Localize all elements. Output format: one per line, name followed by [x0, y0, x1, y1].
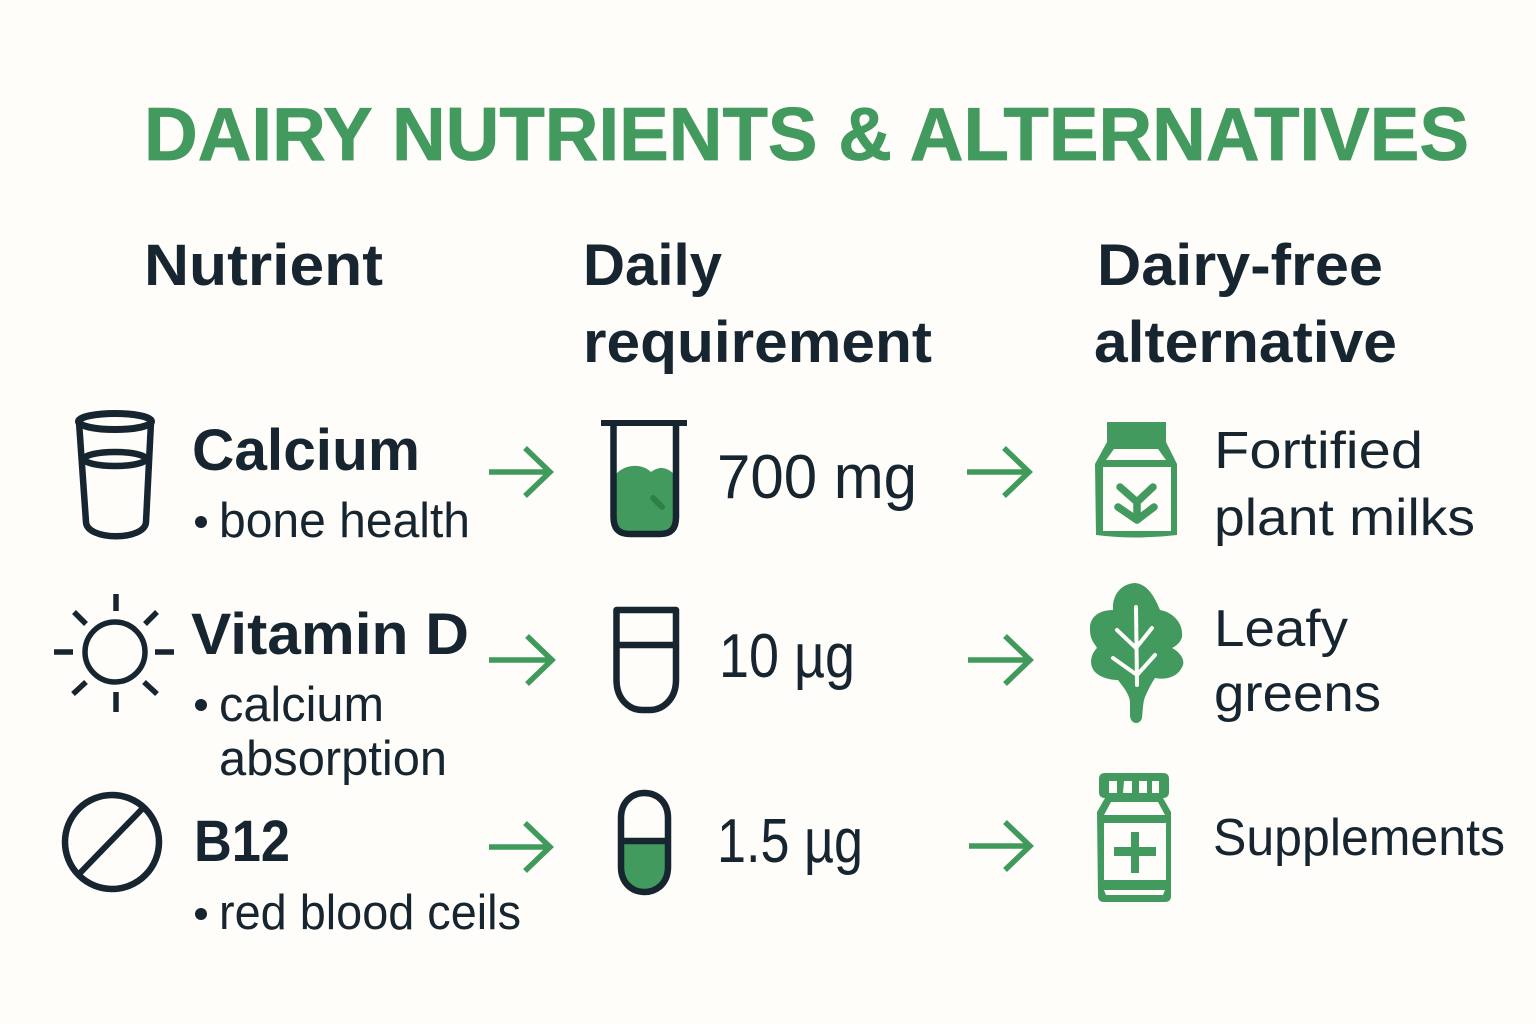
- alternative: leafy greens: Leafy: [1214, 600, 1348, 658]
- nutrient: vitamin D: Vitamin D: [191, 602, 469, 667]
- alternative: supplements: Supplements: [1213, 809, 1505, 867]
- requirement: 700 mg: 700 mg: [717, 443, 917, 512]
- icon: empty capsule: [616, 610, 676, 710]
- requirement: 1.5 µg: 1.5 µg: [717, 807, 863, 876]
- nutrient: B12: [194, 809, 521, 940]
- nutrient: calcium: [192, 418, 470, 548]
- icon: leafy green: [1090, 583, 1183, 723]
- nutrient: B12: B12: [194, 809, 290, 874]
- title: DAIRY NUTRIENTS & ALTERNATIVES: [144, 92, 1469, 176]
- column heading: daily requirement: requirement: [583, 310, 932, 375]
- alternative: leafy greens: [1214, 600, 1381, 723]
- column heading: dairy-free alternative: [1094, 233, 1397, 375]
- column heading: dairy-free alternative: Dairy-free: [1097, 233, 1383, 298]
- arrow: [969, 822, 1030, 870]
- arrow: [489, 448, 550, 496]
- alternative: fortified plant milks: [1214, 422, 1475, 547]
- arrow: [489, 823, 550, 871]
- alternative: fortified plant milks: plant milks: [1214, 489, 1475, 547]
- icon: supplement bottle: [1097, 773, 1171, 902]
- icon: glass of milk: [78, 414, 152, 536]
- alternative: fortified plant milks: Fortified: [1214, 422, 1423, 480]
- nutrient: vitamin D: absorption: [219, 732, 447, 786]
- icon: half-filled pill: [621, 793, 668, 892]
- arrow: [967, 448, 1029, 496]
- icon: prohibition sign: [65, 795, 159, 889]
- requirement: 10 µg: 10 µg: [719, 622, 855, 691]
- nutrient: calcium: Calcium: [192, 418, 420, 483]
- column heading: daily requirement: [583, 233, 932, 375]
- column heading: daily requirement: Daily: [583, 233, 722, 298]
- arrow: [968, 636, 1030, 684]
- column heading: dairy-free alternative: alternative: [1094, 310, 1397, 375]
- nutrient: calcium: bone health: [219, 494, 470, 548]
- nutrient: B12: red blood ceils: [219, 886, 521, 940]
- icon: sun: [54, 594, 174, 712]
- arrow: [489, 636, 552, 684]
- nutrient: vitamin D: [191, 602, 469, 786]
- icon: beaker with green fill: [601, 423, 687, 534]
- nutrient: vitamin D: calcium: [219, 678, 384, 732]
- column heading: nutrient: Nutrient: [144, 233, 383, 298]
- alternative: leafy greens: greens: [1214, 665, 1381, 723]
- icon: plant milk carton: [1095, 422, 1177, 538]
